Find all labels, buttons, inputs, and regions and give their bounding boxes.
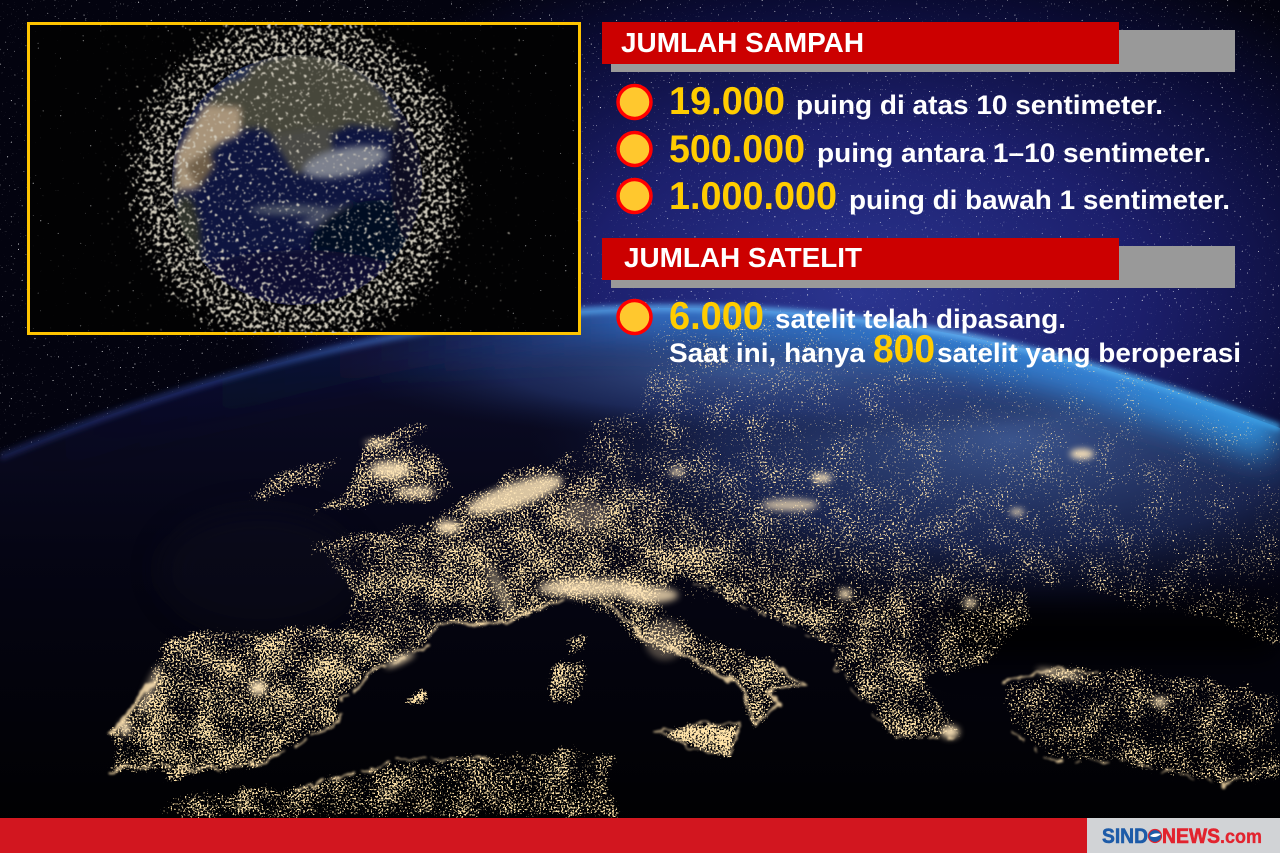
item: 1.000.000: 1.000.000 — [669, 175, 837, 218]
item: 500.000 — [618, 128, 1211, 171]
item: 500.000: 500.000 — [669, 128, 805, 171]
logo: sindonews.com: .com — [1220, 827, 1262, 848]
item: 6.000 satelit: 6.000 — [669, 295, 764, 338]
section: jumlah sampah — [602, 22, 1235, 218]
atmosphere limb glow — [0, 308, 1280, 457]
item: 19.000: 19.000 — [669, 80, 785, 123]
item: 800 satelit beroperasi: Saat ini, hanya — [669, 338, 866, 368]
earth at night — [0, 265, 1280, 853]
heading bar: jumlah sampah — [602, 22, 1235, 72]
item: 1.000.000 — [618, 175, 1230, 218]
bright metropolitan areas — [120, 440, 1167, 738]
item: 6.000 satelit: satelit telah dipasang. — [775, 304, 1066, 334]
item: 19.000: puing di atas 10 sentimeter. — [796, 90, 1163, 120]
bright coastlines — [110, 583, 1270, 790]
logo: sindonews.com — [1102, 825, 1262, 848]
inset photo: space debris around earth — [27, 22, 581, 335]
city lights speckle — [110, 318, 1280, 817]
logo: sindonews.com: SIND — [1102, 825, 1148, 848]
item: 800 satelit beroperasi: satelit yang beroperasi — [937, 338, 1241, 368]
item: 19.000 — [618, 80, 1163, 123]
item: 6.000 satelit — [618, 295, 1066, 338]
inset black frame — [28, 24, 580, 334]
heading bar: jumlah satelit — [602, 238, 1235, 288]
item: 800 satelit beroperasi: 800 — [873, 328, 935, 371]
debris cloud — [119, 2, 475, 358]
heading bar: jumlah sampah: JUMLAH SAMPAH — [621, 27, 864, 58]
section: jumlah satelit — [602, 238, 1241, 371]
globe with continents and clouds — [172, 55, 422, 305]
item: 1.000.000: puing di bawah 1 sentimeter. — [849, 185, 1230, 215]
logo: sindonews.com: NEWS — [1162, 825, 1220, 848]
footer bar — [0, 818, 1280, 853]
item: 500.000: puing antara 1–10 sentimeter. — [817, 138, 1211, 168]
earth globe body — [0, 308, 1280, 818]
heading bar: jumlah satelit: JUMLAH SATELIT — [624, 242, 862, 273]
item: 800 satelit beroperasi — [669, 328, 1241, 371]
